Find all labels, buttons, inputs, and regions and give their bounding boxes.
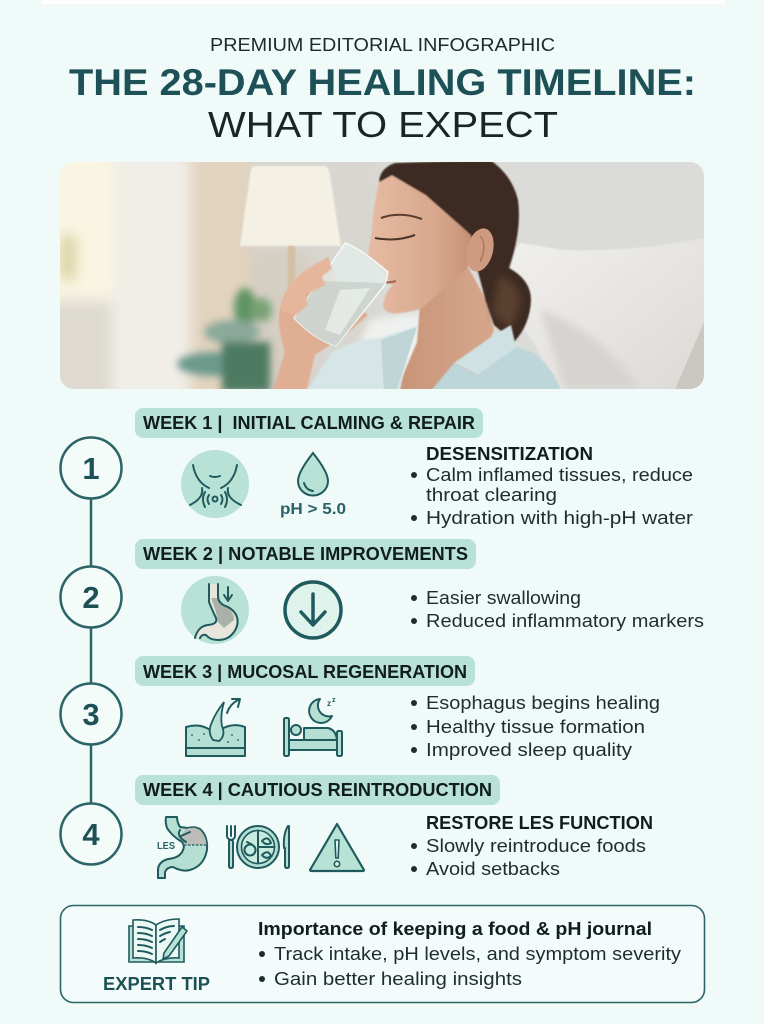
week 2 section (135, 539, 704, 644)
week 3 text: Esophagus begins healing (426, 692, 660, 713)
icon: bed and moon (284, 697, 342, 756)
plant (177, 288, 272, 392)
title line 2: WHAT TO EXPECT (208, 104, 558, 145)
arm and hand (272, 257, 368, 392)
pillow (511, 238, 704, 392)
week 4 heading (135, 775, 500, 805)
week 3 text: Healthy tissue formation (426, 716, 645, 737)
icon: bed and moon: z (327, 699, 331, 708)
circle 1 (60, 438, 122, 498)
circle 1: 1 (82, 451, 100, 486)
week 3 text (411, 692, 660, 760)
week 2 text: Reduced inflammatory markers (426, 610, 704, 631)
icon: stomach with LES (157, 817, 207, 878)
circle 3 (60, 684, 122, 744)
week 3 heading (135, 656, 475, 686)
header (69, 34, 696, 145)
week 2 heading (135, 539, 476, 569)
week 4 text: RESTORE LES FUNCTION (426, 813, 653, 833)
lamp (240, 166, 341, 246)
icon: esophagus and stomach (181, 576, 249, 644)
icon: throat (181, 450, 249, 518)
glass (294, 243, 388, 346)
week 2 text: Easier swallowing (426, 587, 581, 608)
LES label: LES (157, 840, 175, 852)
hair (379, 160, 531, 342)
week 1 text: Calm inflamed tissues, reduce (426, 464, 693, 485)
week 4 section (135, 775, 653, 879)
week 4 text (411, 813, 653, 879)
step circles (60, 438, 122, 864)
eyebrow text: PREMIUM EDITORIAL INFOGRAPHIC (210, 34, 555, 55)
week 4 heading: WEEK 4 | CAUTIOUS REINTRODUCTION (143, 780, 492, 800)
expert tip label: EXPERT TIP (103, 973, 210, 994)
shirt left (306, 326, 417, 392)
week 4 text: Avoid setbacks (426, 858, 560, 879)
icon: journal and pen (129, 919, 187, 963)
circle 4 (60, 804, 122, 864)
icon: tissue regeneration (186, 699, 245, 756)
tip text (258, 919, 682, 989)
week 1 text: throat clearing (426, 484, 557, 505)
circle 3: 3 (82, 697, 100, 732)
shirt right (430, 347, 561, 392)
icon: water drop (280, 453, 346, 518)
top edge strip (42, 0, 725, 4)
timeline connector (90, 499, 92, 803)
circle 4: 4 (82, 817, 100, 852)
icon: warning triangle (310, 824, 364, 871)
face (368, 172, 482, 314)
circle 2: 2 (82, 580, 100, 615)
week 3 section (135, 656, 660, 760)
ponytail highlight (492, 275, 520, 328)
title line 1: THE 28-DAY HEALING TIMELINE: (69, 62, 696, 103)
week 1 text: Hydration with high-pH water (426, 507, 693, 528)
week 4 text: Slowly reintroduce foods (426, 835, 646, 856)
week 1 section (135, 408, 693, 528)
icon: plate and cutlery (227, 826, 289, 868)
pH label: pH > 5.0 (280, 501, 346, 518)
icon: bed and moon: z (332, 697, 336, 704)
collar (454, 325, 516, 375)
week 2 heading: WEEK 2 | NOTABLE IMPROVEMENTS (143, 544, 468, 564)
ear (468, 228, 494, 272)
eyebrow, closed eye, lips (381, 215, 422, 219)
week 3 text: Improved sleep quality (426, 739, 633, 760)
week 3 heading: WEEK 3 | MUCOSAL REGENERATION (143, 662, 467, 682)
icon: down arrow circle (285, 582, 341, 638)
fingers (282, 258, 332, 315)
neck (396, 265, 494, 392)
panel: expert tip (60, 906, 704, 1002)
tip text: Gain better healing insights (274, 968, 522, 989)
circle 2 (60, 566, 122, 628)
photo: woman drinking water in bed (60, 162, 704, 389)
week 1 heading (135, 408, 483, 438)
tip text: Track intake, pH levels, and symptom severity (274, 943, 682, 964)
week 1 text (411, 444, 693, 528)
week 1 heading: WEEK 1 | INITIAL CALMING & REPAIR (143, 413, 475, 433)
week 1 text: DESENSITIZATION (426, 444, 593, 464)
week 2 text (411, 587, 704, 631)
tip text: Importance of keeping a food & pH journal (258, 919, 652, 939)
